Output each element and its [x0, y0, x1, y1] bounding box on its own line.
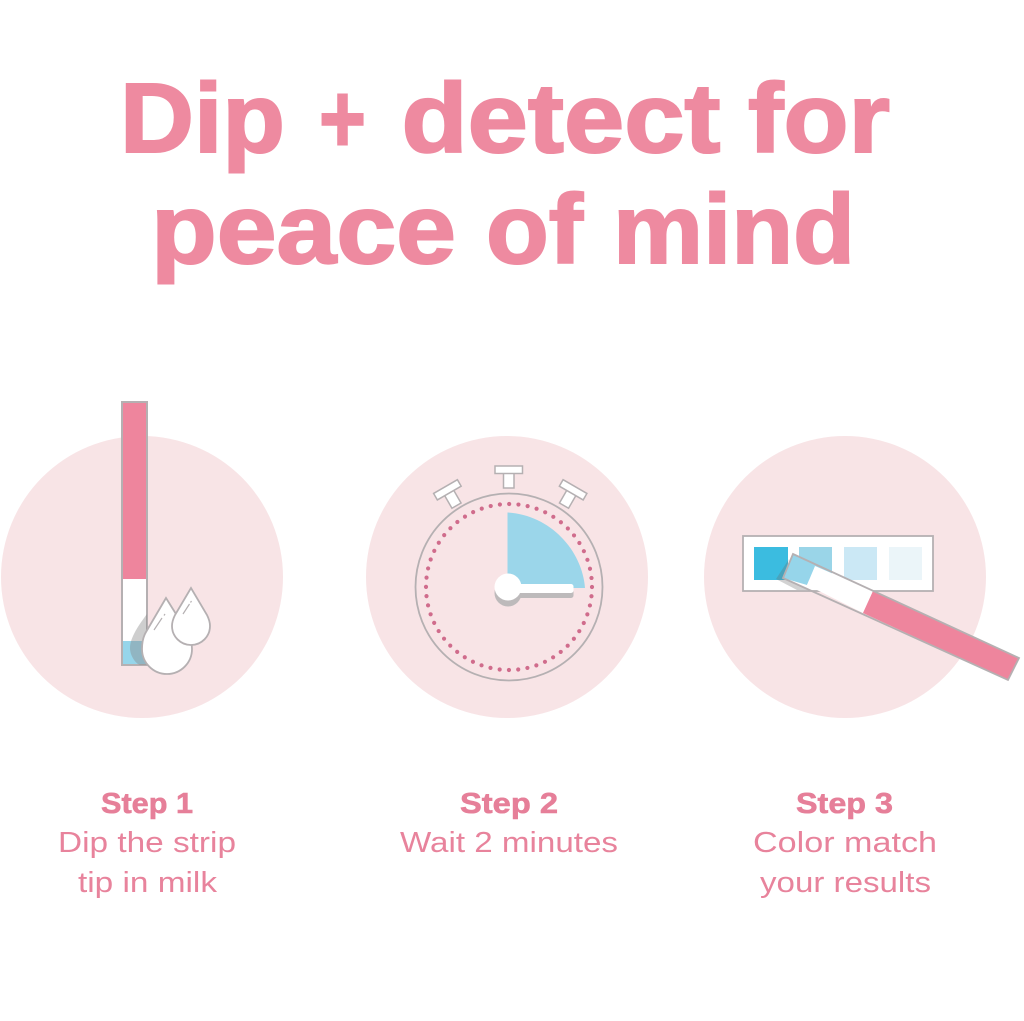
- dotted tick ring: [426, 504, 592, 670]
- title: [120, 63, 890, 284]
- panel: step 1 illustration: [1, 402, 283, 718]
- step 2 caption: Step 2: [460, 788, 558, 820]
- icon: test strip vertical: [122, 402, 147, 665]
- step 1 caption: Dip the strip: [58, 827, 236, 859]
- title: peace: [151, 174, 456, 284]
- panel: step 3 illustration: [704, 436, 1019, 718]
- step 1 caption: [58, 788, 236, 899]
- color chart: [743, 536, 933, 591]
- title: Dip: [120, 63, 285, 173]
- icon: milk drop small: [172, 588, 210, 645]
- strip shadow: [776, 559, 811, 590]
- blue quarter wedge: [508, 512, 585, 588]
- background circle 1: [1, 436, 283, 718]
- title: mind: [613, 174, 855, 284]
- panel: step 2 illustration: [366, 436, 648, 718]
- stopwatch face outline: [416, 494, 602, 680]
- title: for: [748, 63, 890, 173]
- title: detect: [402, 63, 720, 173]
- step 3 caption: your results: [760, 867, 931, 899]
- icon: test strip angled: [783, 554, 1019, 680]
- step 1 caption: Step 1: [101, 788, 193, 820]
- step 3 caption: Color match: [753, 827, 937, 859]
- background circle 2: [366, 436, 648, 718]
- stopwatch hand: [494, 574, 574, 600]
- title: of: [486, 174, 583, 284]
- step 2 caption: Wait 2 minutes: [400, 827, 618, 859]
- title: +: [319, 63, 366, 173]
- drop shadow on strip: [130, 614, 147, 665]
- step 1 caption: tip in milk: [78, 867, 218, 899]
- stopwatch buttons: [434, 466, 587, 512]
- step 2 caption: [400, 788, 618, 859]
- icon: milk drop large: [142, 598, 192, 674]
- background circle 3: [704, 436, 986, 718]
- step 3 caption: Step 3: [796, 788, 893, 820]
- icon: stopwatch: [416, 466, 602, 680]
- step 3 caption: [753, 788, 937, 899]
- hand shadow: [494, 580, 574, 606]
